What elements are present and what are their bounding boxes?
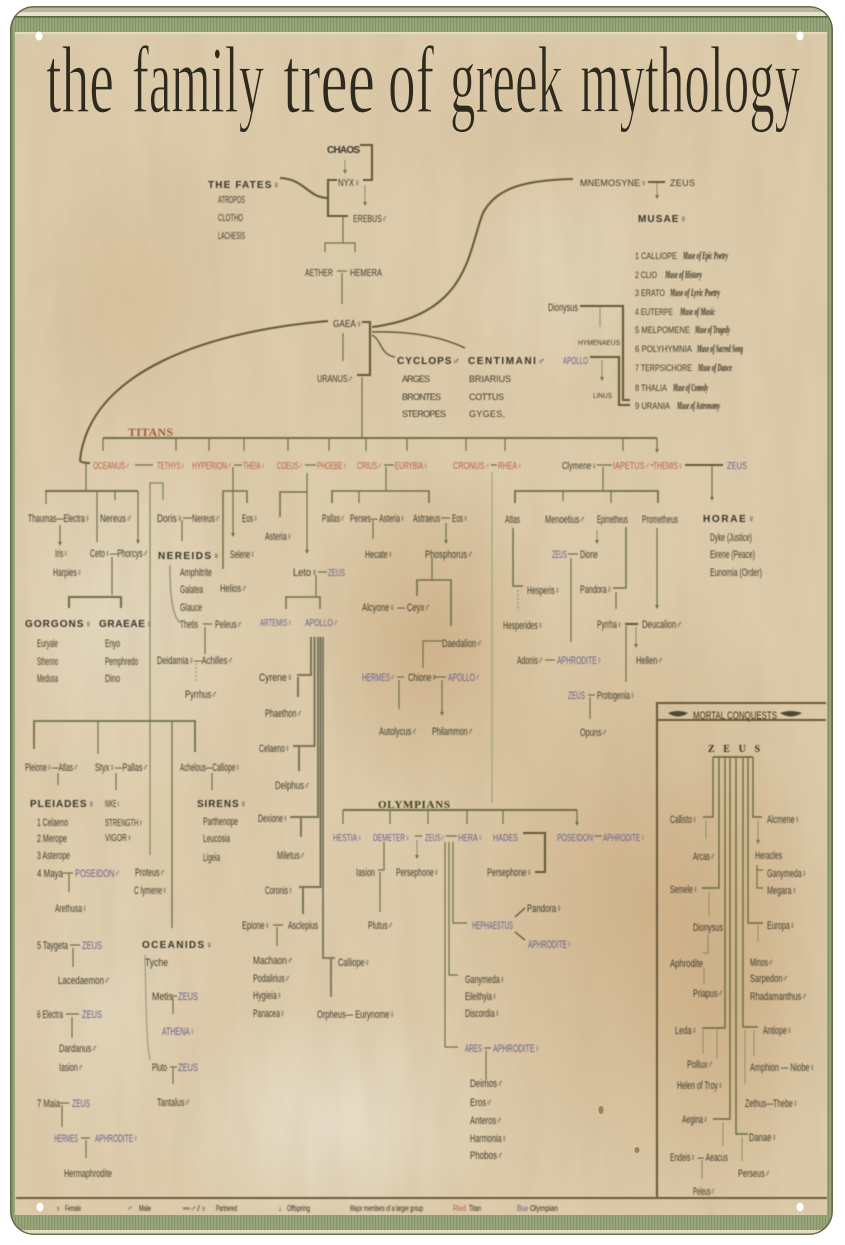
panel: mnemosyne and the muses: Muse of Astronomy [676, 401, 720, 412]
panel: descendants of oceanus and tethys: GORGONS♀ [25, 619, 92, 630]
panel: children of crius and eurybia: Eos♀ [452, 513, 468, 525]
panel: children of crius and eurybia: Chione♀ [408, 672, 437, 684]
icon: mounting hole bottom left [36, 1202, 44, 1212]
panel: mortal conquests: Aphrodite [670, 958, 703, 970]
panel: children of crius and eurybia [322, 467, 482, 738]
panel: olympians: Discordia♀ [465, 1008, 500, 1020]
panel: titans row [93, 425, 747, 472]
panel: children of coeus and phoebe: Asteria♀ [265, 531, 292, 543]
panel: mnemosyne and the muses: Muse of Music [679, 307, 715, 318]
title [46, 27, 800, 133]
panel: children of crius and eurybia: Hecate♀ [365, 549, 393, 561]
panel: olympians: Deimos♂ [470, 1078, 503, 1090]
panel: mortal conquests: Semele♀ [670, 884, 698, 896]
panel: descendants of oceanus and tethys: Doris♀ [157, 513, 183, 525]
panel: mnemosyne and the muses: Dionysus [548, 302, 578, 314]
panel: titans row: IAPETUS♂ [613, 461, 650, 472]
panel: horae: HORAE♀ [703, 514, 755, 525]
panel: primordial gods [80, 145, 573, 463]
panel: mnemosyne and the muses: 1 CALLIOPE [635, 251, 677, 261]
panel: mortal conquests: Endeis♀ — Aeacus [670, 1152, 728, 1164]
panel: mortal conquests: Sarpedon♂ [750, 973, 788, 985]
panel: descendants of oceanus and tethys: Pyrrhus♂ [185, 689, 217, 701]
panel: mnemosyne and the muses: 2 CLIO [635, 270, 657, 280]
panel: pleiades, sirens and oceanids: STRENGTH♀ [105, 818, 143, 829]
panel: olympians: APHRODITE♀ [603, 833, 645, 844]
panel: primordial gods: AETHER [305, 268, 333, 279]
panel: olympians: Anteros♂ [470, 1115, 502, 1127]
icon: mounting hole top right [796, 32, 804, 40]
panel: mnemosyne and the muses: Muse of Lyric Poetry [669, 288, 720, 299]
panel: children of hyperion and theia [220, 467, 258, 595]
panel: mnemosyne and the muses: ZEUS [670, 178, 695, 188]
panel: mnemosyne and the muses: MUSAE♀ [638, 214, 687, 225]
panel: children of crius and eurybia: Phosphorus♂ [425, 549, 473, 561]
legend: ↓ [278, 1204, 282, 1213]
panel: pleiades, sirens and oceanids: 1 Celaeno [37, 817, 68, 829]
panel: descendants of oceanus and tethys: Galatea [180, 584, 204, 596]
panel: titans row: THEIA♀ [243, 461, 265, 472]
title: tree [283, 27, 375, 133]
panel: children of crius and eurybia: Philammon♂ [432, 726, 473, 738]
panel: descendants of iapetus: Dione [580, 549, 598, 561]
panel: mnemosyne and the muses: Muse of Sacred Song [696, 344, 743, 355]
panel: pleiades, sirens and oceanids: ZEUS [178, 1062, 198, 1074]
panel: descendants of oceanus and tethys: Thaumas—Electra♀ [28, 513, 90, 525]
panel: descendants of oceanus and tethys: Amphitrite [180, 567, 212, 579]
title: greek [450, 27, 563, 133]
panel: primordial gods: GAEA♀ [333, 319, 362, 330]
panel: descendants of oceanus and tethys: Sthenno [37, 656, 58, 668]
panel: mortal conquests: Europa♀ [767, 920, 795, 932]
panel: primordial gods: NYX♀ [338, 178, 360, 189]
panel: cyclops and centimani [397, 356, 545, 419]
panel: descendants of oceanus and tethys: Deidamia♀—Achilles♂ [157, 655, 233, 667]
panel: pleiades, sirens and oceanids: NIKE♀ [105, 799, 120, 810]
panel: mnemosyne and the muses: 6 POLYHYMNIA [635, 344, 692, 354]
panel: descendants of iapetus: Deucalion♂ [642, 619, 682, 631]
panel: titans row: TETHYS♀ [157, 461, 185, 472]
panel: olympians: APHRODITE♀ [493, 1043, 540, 1055]
panel: titans row: CRIUS♂ [357, 461, 382, 472]
panel: titans row: EURYBIA♀ [395, 461, 428, 472]
panel: olympians: Ganymeda♀ [465, 974, 505, 986]
panel: pleiades, sirens and oceanids: 3 Asterope [37, 850, 70, 862]
line: cronus and rhea to olympians [491, 472, 493, 803]
panel: mortal conquests: Callisto♀ [670, 814, 697, 826]
panel: pleiades, sirens and oceanids: POSEIDON♂ [75, 868, 120, 880]
panel: cyclops and centimani: STEROPES [402, 409, 446, 419]
panel: horae: Eunomia (Order) [710, 567, 762, 579]
panel: mortal conquests: Amphion — Niobe♀ [750, 1062, 815, 1074]
panel: titans row: OCEANUS♂ [93, 461, 130, 472]
panel: pleiades, sirens and oceanids: Styx♀—Pallas♂ [95, 762, 148, 774]
panel: pleiades, sirens and oceanids: Hermaphrodite [64, 1168, 112, 1180]
panel: descendants of oceanus and tethys: Peleus♂ [215, 619, 242, 631]
panel: descendants of oceanus and tethys: Iris♀ [55, 548, 68, 560]
panel: cyclops and centimani: BRONTES [402, 392, 441, 402]
panel: children of hyperion and theia: Selene♀ [230, 549, 255, 561]
panel: titans row: HYPERION♂ [192, 461, 232, 472]
panel: olympians: APHRODITE♀ [528, 939, 572, 951]
panel: olympians: Pandora♀ [527, 903, 562, 915]
panel: descendants of iapetus: Hellen♂ [636, 655, 663, 667]
panel: descendants of oceanus and tethys: Glauce [180, 602, 202, 614]
panel: mortal conquests [657, 703, 826, 1198]
panel: descendants of oceanus and tethys: GRAEAE♀ [99, 619, 153, 630]
legend: Titan [469, 1204, 481, 1213]
legend: Blue [517, 1204, 528, 1213]
panel: pleiades, sirens and oceanids: SIRENS♀ [197, 799, 247, 810]
panel: mortal conquests: ZEUS [708, 744, 760, 755]
panel: primordial gods: CLOTHO [218, 213, 243, 224]
panel: primordial gods: LACHESIS [218, 231, 245, 242]
panel: descendants of oceanus and tethys: Euryale [37, 638, 58, 650]
panel: pleiades, sirens and oceanids: Proteus♂ [135, 867, 165, 879]
panel: descendants of iapetus: Atlas [505, 514, 520, 526]
panel: children and consorts of apollo: Orpheus— Eurynome♀ [317, 1009, 395, 1021]
panel: olympians: DEMETER♀ [373, 833, 410, 844]
panel: olympians: Eileithyia♀ [465, 991, 497, 1003]
panel: descendants of iapetus: Pandora♀ [580, 584, 612, 596]
panel: pleiades, sirens and oceanids: Metis [152, 991, 173, 1003]
panel: pleiades, sirens and oceanids: PLEIADES♀ [30, 799, 95, 810]
panel: mortal conquests: Perseus♂ [738, 1168, 770, 1180]
panel: cyclops and centimani: GYGES, [469, 409, 505, 419]
panel: cyclops and centimani: CENTIMANI♂ [468, 356, 545, 367]
panel: descendants of iapetus: Prometheus [642, 514, 678, 526]
panel: mnemosyne and the muses: 5 MELPOMENE [635, 325, 690, 335]
panel: children of crius and eurybia: Pallas♂ [322, 513, 345, 525]
panel: olympians: HERA♀ [458, 833, 483, 844]
panel: cyclops and centimani: CYCLOPS♂ [397, 356, 460, 367]
panel: children of crius and eurybia: Alcyone♀ — Ceyx♂ [362, 602, 430, 614]
panel: descendants of oceanus and tethys: Dino [105, 673, 120, 685]
panel: mortal conquests: Aegina♀ [682, 1114, 708, 1126]
legend: Red [453, 1204, 466, 1213]
panel: cyclops and centimani: BRIARIUS [469, 374, 511, 384]
panel: descendants of iapetus [503, 467, 682, 739]
panel: pleiades, sirens and oceanids: C lymene♀ [134, 885, 167, 897]
panel: mnemosyne and the muses: Muse of Comedy [672, 383, 708, 394]
panel: descendants of iapetus: Adonis♂ [517, 655, 543, 667]
panel: children of coeus and phoebe: ZEUS [328, 568, 345, 579]
panel: pleiades, sirens and oceanids: HERMES [54, 1133, 78, 1145]
panel: olympians: Harmonia♀ [470, 1133, 507, 1145]
legend: Female [65, 1204, 81, 1213]
panel: descendants of iapetus: Protogenia♀ [597, 690, 635, 702]
panel: descendants of iapetus: Hesperis♀ [527, 585, 560, 597]
panel: pleiades, sirens and oceanids: ZEUS [82, 940, 102, 952]
panel: children and consorts of apollo: Panacea♀ [253, 1008, 285, 1020]
panel: children of coeus and phoebe: APOLLO♂ [305, 618, 338, 629]
panel: descendants of oceanus and tethys: Harpies♀ [53, 567, 82, 579]
panel: primordial gods: CHAOS [327, 145, 360, 156]
panel: olympians: HEPHAESTUS [472, 920, 513, 932]
panel: olympians: Persephone♀ [487, 867, 532, 879]
title: family [132, 27, 264, 133]
panel: descendants of oceanus and tethys: Ceto♀—Phorcys♂ [90, 548, 148, 560]
panel: children of crius and eurybia: HERMES♂ [362, 672, 395, 684]
panel: pleiades, sirens and oceanids: 4 Maya [37, 868, 64, 880]
icon: mounting hole bottom right [796, 1202, 804, 1212]
panel: primordial gods: URANUS♂ [317, 374, 353, 385]
panel: children and consorts of apollo: Epione♀ [242, 920, 270, 932]
panel: descendants of oceanus and tethys: NEREIDS♀ [158, 551, 220, 562]
panel: primordial gods: ATROPOS [218, 195, 245, 206]
panel: titans row: PHOEBE♀ [317, 461, 347, 472]
legend: ♀ [55, 1204, 61, 1213]
panel: pleiades, sirens and oceanids: ZEUS [82, 1009, 102, 1021]
panel: primordial gods: THE FATES♀ [208, 180, 280, 191]
panel: pleiades, sirens and oceanids: Lacedaemon♂ [58, 975, 110, 987]
panel: descendants of iapetus: Epimetheus [597, 514, 628, 526]
panel: children and consorts of apollo: Calliope♀ [338, 957, 370, 969]
panel: mnemosyne and the muses: 9 URANIA [635, 401, 670, 411]
title: the [46, 27, 114, 133]
panel: mnemosyne and the muses [548, 178, 743, 412]
panel: descendants of oceanus and tethys: Thetis [180, 619, 198, 631]
panel: olympians: Eros♂ [470, 1097, 492, 1109]
panel: titans row: Clymene♀ [562, 461, 597, 472]
panel: titans row: ZEUS [727, 461, 747, 472]
panel: pleiades, sirens and oceanids: Leucosia [203, 833, 231, 845]
panel: mortal conquests: Antiope♀ [763, 1025, 792, 1037]
panel: horae: Eirene (Peace) [710, 549, 755, 561]
icon: mounting hole top left [36, 32, 42, 40]
panel: mortal conquests: Alcmene♀ [767, 814, 800, 826]
panel: mortal conquests: Arcas♂ [693, 851, 715, 863]
panel: children and consorts of apollo: Asclepius [288, 920, 318, 932]
panel: pleiades, sirens and oceanids: ZEUS [72, 1098, 90, 1110]
panel: children and consorts of apollo: Miletus♂ [277, 850, 305, 862]
panel: pleiades, sirens and oceanids: Achelous—Calliope♀ [180, 762, 240, 774]
panel: pleiades, sirens and oceanids: Ligeia [203, 852, 221, 864]
panel: titans row: TITANS [128, 425, 173, 439]
panel: descendants of oceanus and tethys: Nereus♂ [100, 513, 132, 525]
panel: children and consorts of apollo: Delphus♂ [275, 780, 310, 792]
panel: descendants of iapetus: Menoetius♂ [545, 514, 585, 526]
panel: mortal conquests: Megara♀ [767, 885, 797, 897]
panel: descendants of iapetus: APHRODITE♀ [557, 655, 602, 667]
panel: children and consorts of apollo: Cyrene♀ [259, 672, 293, 684]
panel: pleiades, sirens and oceanids: Dardanus♂ [59, 1043, 97, 1055]
panel: children and consorts of apollo: Dexione♀ [258, 813, 288, 825]
panel: olympians: Iasion [356, 867, 375, 879]
panel: descendants of iapetus: Opuns♂ [580, 727, 607, 739]
panel: descendants of iapetus: ZEUS [568, 690, 585, 702]
panel: olympians: Phobos♂ [470, 1150, 503, 1162]
panel: mortal conquests: Leda♀ [675, 1025, 697, 1037]
panel: pleiades, sirens and oceanids: ATHENA♀ [162, 1026, 195, 1038]
panel: titans row: RHEA♀ [498, 461, 522, 472]
panel: pleiades, sirens and oceanids: Pleione♀—Atlas♂ [25, 762, 78, 774]
panel: children of crius and eurybia: Daedalion♂ [442, 638, 482, 650]
heading: mortal conquests: MORTAL CONQUESTS [693, 710, 777, 722]
panel: horae: Dyke (Justice) [710, 532, 752, 544]
panel: pleiades, sirens and oceanids: Arethusa♀ [55, 903, 87, 915]
legend: ♂ [127, 1204, 133, 1213]
panel: children and consorts of apollo: Phaethon♂ [265, 708, 302, 720]
panel: mortal conquests: Pollux♂ [687, 1059, 713, 1071]
panel: descendants of iapetus: ZEUS [552, 549, 567, 561]
panel: pleiades, sirens and oceanids [25, 721, 247, 1180]
panel: children of crius and eurybia: APOLLO♂ [448, 672, 480, 684]
panel: mortal conquests: Heracles [755, 850, 782, 862]
panel: children and consorts of apollo: Hygieia♀ [253, 990, 282, 1002]
panel: children of coeus and phoebe [260, 473, 345, 629]
legend [16, 1198, 827, 1213]
panel: pleiades, sirens and oceanids: ZEUS [178, 991, 198, 1003]
panel: olympians: HADES [493, 833, 518, 844]
panel: pleiades, sirens and oceanids: Parthenope [203, 816, 238, 828]
panel: children and consorts of apollo: Machaon♂ [253, 955, 293, 967]
panel: children of hyperion and theia: Helios♂ [220, 583, 247, 595]
panel: mnemosyne and the muses: 3 ERATO [635, 288, 665, 298]
panel: descendants of iapetus: Pyrrha♀ [597, 619, 622, 631]
panel: titans row: THEMIS♀ [653, 461, 683, 472]
panel: pleiades, sirens and oceanids: VIGOR♀ [105, 833, 132, 844]
panel: children of coeus and phoebe: ARTEMIS♀ [260, 618, 292, 629]
panel: mnemosyne and the muses: APOLLO [563, 356, 588, 367]
legend: Olympian [530, 1204, 558, 1213]
panel: olympians: Persephone♀ [396, 867, 439, 879]
panel: mortal conquests: Dionysus [693, 922, 723, 934]
panel: mnemosyne and the muses: Muse of Dance [697, 363, 732, 374]
legend: Major members of a larger group [350, 1204, 423, 1213]
panel: olympians: ZEUS♂ [425, 833, 445, 844]
panel: children of coeus and phoebe: Leto♀ [293, 567, 318, 579]
panel: descendants of iapetus: Hesperides♀ [503, 620, 543, 632]
panel: pleiades, sirens and oceanids: 5 Taygeta [37, 940, 69, 952]
panel: mortal conquests: Rhadamanthus♂ [750, 991, 807, 1003]
panel: titans row: COEUS♂ [277, 461, 303, 472]
panel: descendants of oceanus and tethys: Enyo [105, 638, 120, 650]
panel: mnemosyne and the muses: Muse of History [664, 270, 702, 281]
panel: mnemosyne and the muses: MNEMOSYNE♀ [580, 178, 647, 188]
panel: descendants of oceanus and tethys: Nereus♂ [192, 513, 220, 525]
panel: pleiades, sirens and oceanids: Tyche [145, 957, 168, 969]
panel: primordial gods: HEMERA [350, 268, 382, 279]
panel: pleiades, sirens and oceanids: Pluto [152, 1062, 167, 1074]
panel: mnemosyne and the muses: 8 THALIA [635, 383, 667, 393]
panel: mnemosyne and the muses: Muse of Tragedy [694, 325, 730, 336]
panel: titans row: CRONUS♂ [453, 461, 490, 472]
panel: children and consorts of apollo: Coronis♀ [265, 885, 293, 897]
panel: cyclops and centimani: COTTUS [469, 392, 504, 402]
panel: pleiades, sirens and oceanids: Iasion♂ [59, 1062, 83, 1074]
panel: pleiades, sirens and oceanids: 6 Electra [37, 1009, 64, 1021]
panel: horae [703, 466, 762, 579]
panel: olympians: HESTIA♀ [333, 833, 362, 844]
panel: olympians [333, 799, 645, 1162]
panel: olympians: ARES [465, 1043, 482, 1055]
panel: mnemosyne and the muses: LINUS [593, 391, 612, 400]
panel: children and consorts of apollo: Celaeno♀ [259, 743, 290, 755]
panel: pleiades, sirens and oceanids: 2 Merope [37, 833, 67, 845]
panel: mnemosyne and the muses: 7 TERPSICHORE [635, 363, 692, 373]
panel: children of crius and eurybia: Astraeus [413, 513, 440, 525]
panel: mnemosyne and the muses: 4 EUTERPE [635, 307, 673, 317]
panel: pleiades, sirens and oceanids: APHRODITE♀ [95, 1133, 138, 1145]
panel: descendants of oceanus and tethys: Pemphredo [105, 656, 138, 668]
panel: olympians: OLYMPIANS [378, 799, 450, 811]
legend: ═♂/♀ [182, 1204, 207, 1213]
panel: primordial gods: EREBUS♂ [353, 214, 387, 225]
panel: pleiades, sirens and oceanids: Tantalus♂ [157, 1097, 190, 1109]
panel: children and consorts of apollo: Podalirius♂ [253, 973, 290, 985]
panel: children of crius and eurybia: Autolycus♂ [379, 726, 417, 738]
panel: pleiades, sirens and oceanids: OCEANIDS♀ [142, 940, 213, 951]
panel: cyclops and centimani: ARGES [402, 374, 430, 384]
legend: Male [139, 1204, 151, 1213]
panel: mortal conquests: Danae♀ [749, 1132, 777, 1144]
panel: mortal conquests: Peleus♂ [693, 1186, 715, 1198]
panel: pleiades, sirens and oceanids: 7 Maia [37, 1098, 61, 1110]
panel: descendants of oceanus and tethys [25, 463, 242, 855]
panel: mnemosyne and the muses: HYMENAEUS [578, 338, 620, 347]
panel: children and consorts of apollo [242, 637, 395, 1021]
legend: Partnered [216, 1204, 237, 1213]
panel: mortal conquests: Zethus—Thebe♀ [745, 1098, 798, 1110]
panel: mortal conquests: Helen of Troy♀ [677, 1080, 723, 1092]
panel: olympians: POSEIDON [557, 833, 593, 844]
panel: descendants of oceanus and tethys: Medusa [37, 673, 58, 685]
panel: children of crius and eurybia: Perses— Asteria♀ [350, 513, 405, 525]
legend: Offspring [287, 1204, 310, 1213]
panel: children of hyperion and theia: Eos♀ [242, 513, 258, 525]
panel: mnemosyne and the muses: Muse of Epic Poetry [682, 251, 728, 262]
panel: mortal conquests: Ganymeda♀ [767, 868, 807, 880]
panel: mortal conquests: Minos♂ [750, 957, 773, 969]
title: of [388, 27, 434, 133]
panel: olympians: Plutus♂ [368, 920, 393, 932]
panel: mortal conquests: Priapus♂ [693, 988, 723, 1000]
